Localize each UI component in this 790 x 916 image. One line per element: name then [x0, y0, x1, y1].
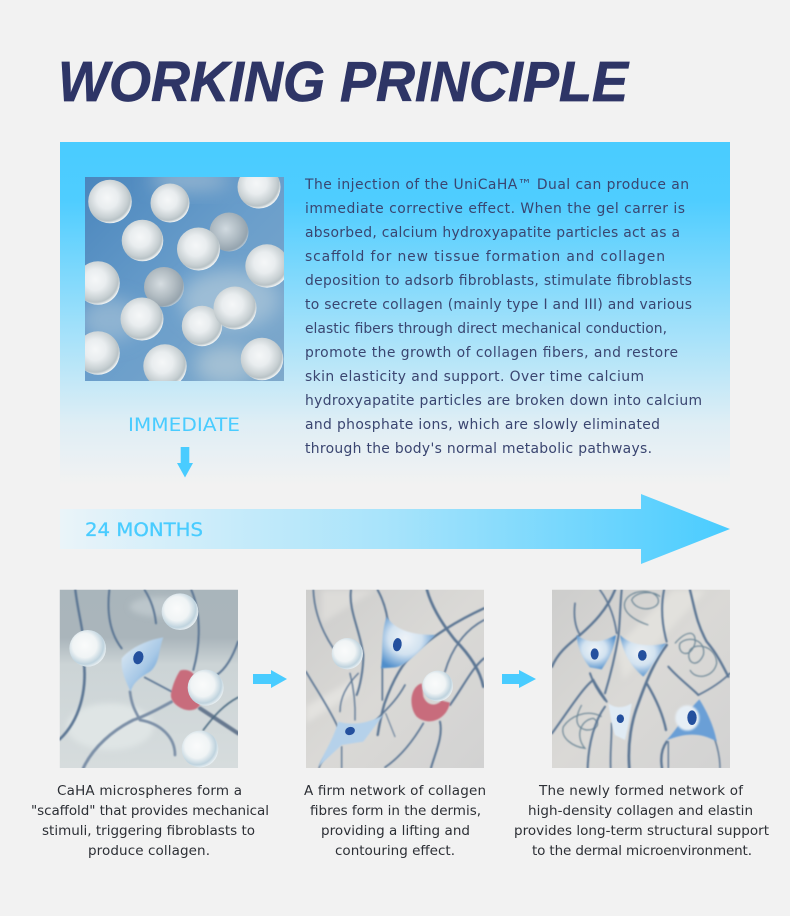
caption: step three: provides long-term structural support [514, 823, 769, 839]
description text: immediate corrective effect. When the gel carrer is [305, 201, 685, 217]
arrow: 24 months timeline [60, 494, 730, 564]
microspheres [332, 638, 453, 701]
caption: step two: A firm network of collagen [304, 783, 486, 799]
label: immediate: IMMEDIATE [128, 414, 240, 436]
description text: and phosphate ions, which are slowly eliminated [305, 417, 660, 433]
label: 24 months: 24 MONTHS [85, 519, 203, 541]
description text: deposition to adsorb fibroblasts, stimulate fibroblasts [305, 273, 692, 289]
caption: step three: high-density collagen and elastin [528, 803, 753, 819]
caption: step two [304, 783, 486, 859]
description text: elastic fibers through direct mechanical conduction, [305, 321, 667, 337]
microspheres [69, 593, 224, 767]
description text: absorbed, calcium hydroxyapatite particles act as a [305, 225, 680, 241]
caption: step one: produce collagen. [88, 843, 210, 859]
image: new collagen and elastin network [552, 590, 730, 768]
description text: skin elasticity and support. Over time calcium [305, 369, 644, 385]
arrow: down [177, 447, 193, 478]
caption: step one: "scaffold" that provides mechanical [31, 803, 269, 819]
panel: immediate effect [60, 142, 730, 486]
caption: step three [514, 783, 769, 859]
image: firm collagen network [306, 590, 484, 768]
caption: step two: fibres form in the dermis, [310, 803, 481, 819]
title: WORKING PRINCIPLE [58, 50, 630, 114]
description text: through the body's normal metabolic pathways. [305, 441, 652, 457]
caption: step three: The newly formed network of [538, 783, 744, 799]
description text: to secrete collagen (mainly type I and III) and various [305, 297, 692, 313]
arrow: step two to three [502, 670, 536, 688]
elastin coils [563, 591, 717, 748]
image: calcium hydroxyapatite microspheres [85, 177, 284, 381]
caption: step one: stimuli, triggering fibroblasts to [42, 823, 255, 839]
description text: The injection of the UniCaHA™ Dual can produce an [304, 177, 689, 193]
caption: step two: providing a lifting and [321, 823, 470, 839]
description text: promote the growth of collagen fibers, and restore [305, 345, 678, 361]
image: microspheres form scaffold [60, 590, 238, 768]
caption: step one [31, 783, 269, 859]
description text [304, 177, 702, 457]
caption: step two: contouring effect. [335, 843, 455, 859]
arrow: step one to two [253, 670, 287, 688]
caption: step one: CaHA microspheres form a [57, 783, 242, 799]
description text: hydroxyapatite particles are broken down into calcium [305, 393, 702, 409]
description text: scaffold for new tissue formation and collagen [305, 249, 665, 265]
caption: step three: to the dermal microenvironment. [532, 843, 752, 859]
